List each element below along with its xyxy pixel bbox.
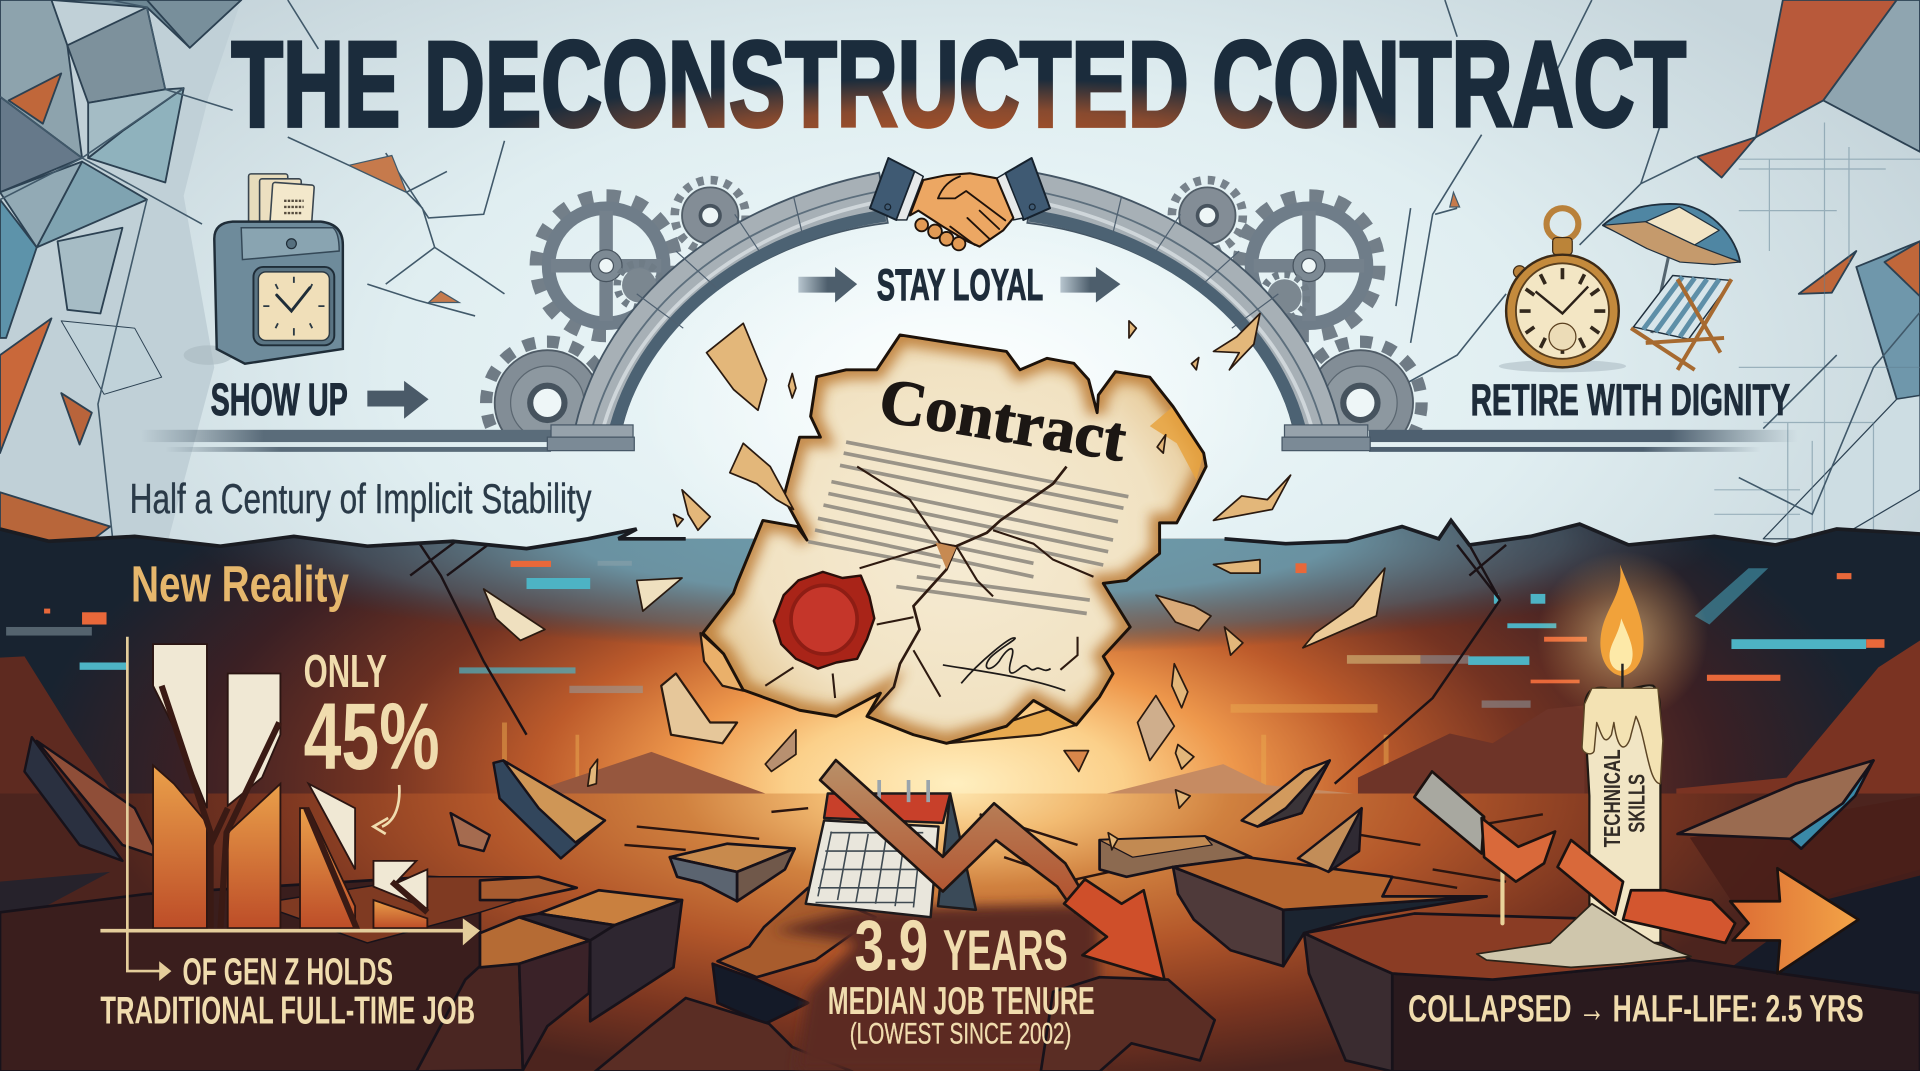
icon: handshake: [870, 158, 1050, 250]
wall cracks: [0, 0, 1920, 539]
ledge rocks: right: [1100, 760, 1920, 1071]
small arrow: [373, 785, 399, 834]
stat: only 45%: [304, 645, 440, 789]
stat: only 45%: ONLY: [304, 645, 387, 697]
axes: [127, 637, 167, 971]
signature: [943, 638, 1065, 691]
bar chart: gen z full-time: [100, 637, 480, 981]
arrow: collapsed half-life: [1414, 771, 1858, 974]
upper panel: half a century of stability: [0, 0, 1920, 600]
stat: 3.9 years: [828, 907, 1095, 1050]
contract: torn burning document: [703, 334, 1206, 743]
heading: new reality: New Reality: [131, 554, 349, 612]
blueprint grid lines: [1714, 122, 1920, 539]
wall cracks in dark zone: [410, 539, 1506, 784]
caption: gen z: [100, 952, 475, 1033]
centre glow behind contract: [639, 208, 1276, 600]
bar 1: [153, 644, 207, 928]
small orange wall chips: [349, 156, 1460, 302]
stat: 3.9 years: (LOWEST SINCE 2002): [850, 1017, 1071, 1050]
arrow: falling tenure zigzag: [820, 760, 1164, 980]
stone arch: left half: [576, 173, 888, 426]
shattered shards: right wall: [1697, 0, 1920, 539]
panel: new reality lower landscape: [0, 520, 1920, 1071]
wax seal: [774, 572, 874, 669]
icon: time clock: [184, 174, 343, 365]
ledge rocks: left: [0, 844, 795, 1071]
contract heading: Contract: [874, 364, 1131, 475]
label: show up: SHOW UP: [211, 374, 348, 425]
falling rock shards: [24, 737, 1362, 872]
arrow: show up: [367, 381, 429, 419]
label: stay loyal: STAY LOYAL: [877, 261, 1043, 310]
gears: right: [1172, 180, 1422, 464]
stone arch: right half: [1027, 173, 1340, 426]
icon: calendar: [806, 780, 976, 917]
stat: 3.9 years: YEARS: [943, 919, 1068, 983]
text lines: [808, 442, 1128, 614]
gears: left: [486, 180, 746, 464]
digital glitch marks: [6, 560, 1884, 785]
left base beam: [141, 425, 634, 452]
icon: technical skills candle: [1477, 551, 1708, 967]
torn edge: [0, 529, 686, 549]
bar 2: [228, 674, 280, 928]
stat: 3.9 years: MEDIAN JOB TENURE: [828, 980, 1095, 1023]
icon: pocket watch: [1499, 208, 1626, 372]
candle label: TECHNICAL: [1599, 749, 1625, 847]
shattered shards: top left wall: [0, 0, 241, 551]
ledge rocks: centre: [595, 888, 1215, 1071]
bar 3: [300, 784, 355, 928]
crack tree: [162, 686, 427, 931]
stat: only 45%: 45%: [304, 684, 440, 789]
ground cracks: [624, 808, 1543, 888]
icon: beach umbrella and deck chair: [1603, 204, 1740, 370]
ground plain: [0, 794, 1920, 1071]
caption: gen z: TRADITIONAL FULL-TIME JOB: [100, 990, 475, 1033]
cracks: [765, 467, 1093, 716]
bar 4: [373, 861, 427, 928]
debris: flying paper fragments: [484, 313, 1385, 850]
distant mountains: [0, 640, 1920, 794]
subtitle: half a century of implicit stability: Half a Century of Implicit Stability: [130, 475, 592, 522]
torn edge: right: [1224, 520, 1920, 545]
caption: gen z: OF GEN Z HOLDS: [182, 952, 393, 994]
stat: 3.9 years: 3.9: [855, 907, 928, 986]
candle label: SKILLS: [1623, 774, 1649, 833]
paper curls: [661, 633, 1076, 743]
candle label: [1599, 749, 1649, 847]
right base beam: [1282, 425, 1798, 452]
